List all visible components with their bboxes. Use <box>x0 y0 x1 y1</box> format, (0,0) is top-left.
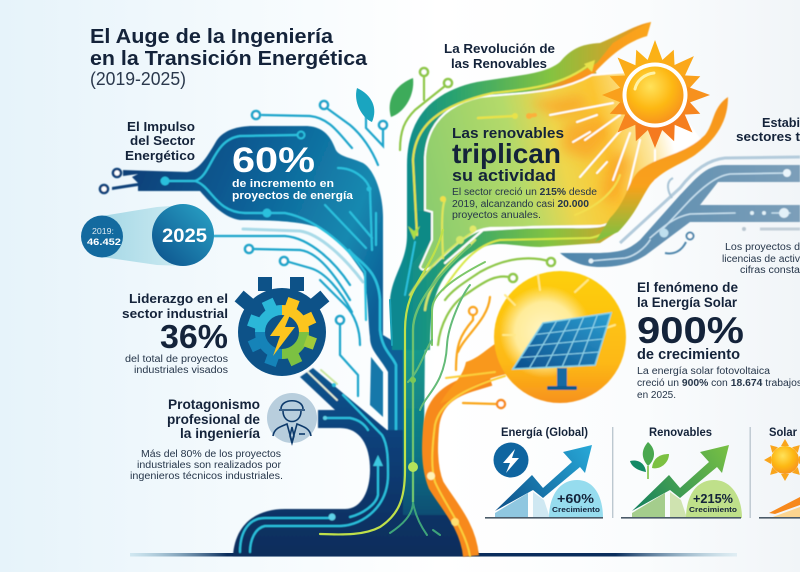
text: stability body, cropped at right edge: Los proyectos d <box>725 242 800 253</box>
chart card: renewables: Renovables <box>649 427 712 439</box>
chart card: renewables <box>621 427 742 519</box>
panel text: renewables triple: triplican <box>452 138 561 169</box>
panel: professional role: Protagonismo <box>168 397 260 412</box>
leaf: teal <box>356 88 374 122</box>
gear icon <box>235 277 329 376</box>
chart card: global energy: Energía (Global) <box>501 427 588 439</box>
growth arrow <box>632 445 729 511</box>
branch tip nodes <box>113 169 121 177</box>
panel: industrial leadership: Liderazgo en el <box>129 291 228 306</box>
panel: solar energy stat: La energía solar fotovoltaica <box>637 366 770 377</box>
text: stability body, cropped at right edge: licencias de activ <box>722 254 800 265</box>
orange blob joining circle <box>440 338 515 404</box>
icon: lightning badge <box>494 442 528 478</box>
panel: professional role: industriales son realizados por <box>137 460 282 471</box>
blue stub beside trunk <box>370 357 383 417</box>
panel text: renewables triple: su actividad <box>452 166 556 185</box>
panel: solar energy stat <box>637 280 800 401</box>
chart card: renewables: +215% <box>693 492 733 506</box>
leaf: green <box>390 78 413 117</box>
lightning bolt <box>270 310 295 356</box>
heading: stability, cropped at right edge <box>736 115 800 144</box>
panel text: renewables triple <box>452 125 597 221</box>
panel: energy sector heading: Energético <box>125 148 195 163</box>
heading: stability, cropped at right edge: Estabi <box>762 115 800 130</box>
panel: industrial leadership: industriales visados <box>134 365 228 376</box>
orange overlay on upper band <box>517 22 651 96</box>
sun <box>602 40 710 148</box>
orange glow patches <box>528 95 632 205</box>
heading: renewables revolution: La Revolución de <box>444 41 555 56</box>
panel: energy sector heading: El Impulso <box>127 119 195 134</box>
panel text: renewables triple: 2019, alcanzando casi 20.000 <box>452 199 589 210</box>
blue branch lines on white <box>214 109 383 396</box>
orange branch <box>430 378 490 556</box>
chart card: solar, cropped: Solar <box>769 427 798 439</box>
stat: 60 percent <box>232 141 354 202</box>
outer green band <box>390 22 651 350</box>
right orange band <box>595 97 728 242</box>
icon: small sun <box>764 439 800 481</box>
title <box>90 26 368 89</box>
chart card: global energy: Crecimiento <box>552 505 600 514</box>
gear teeth <box>247 297 317 367</box>
text: stability body, cropped at right edge <box>722 242 800 276</box>
icon: engineer portrait <box>267 393 317 443</box>
green tint of central trunk <box>403 345 455 515</box>
growth arrow <box>495 445 592 511</box>
panel: industrial leadership <box>122 291 228 376</box>
stat: 60 percent: proyectos de energía <box>232 190 354 202</box>
bottom ground line <box>130 553 737 556</box>
separator <box>612 427 613 518</box>
panel: solar energy stat: El fenómeno de <box>637 280 738 295</box>
panel: energy sector heading <box>125 119 195 163</box>
tree: blue engineering branches <box>100 101 480 556</box>
icon: leaves <box>630 442 669 479</box>
trunk lines <box>320 230 485 535</box>
panel: energy sector heading: del Sector <box>130 133 195 148</box>
circuit dots <box>160 176 372 218</box>
dark teal notch <box>407 210 432 270</box>
panel: professional role: ingenieros técnicos industriales. <box>130 471 283 482</box>
inner panel <box>420 70 700 270</box>
comparison 2019 to 2025 <box>81 204 214 266</box>
title: en la Transición Energética <box>90 48 368 70</box>
stat: 60 percent: de incremento en <box>232 178 334 190</box>
panel: professional role: Más del 80% de los proyectos <box>141 449 281 460</box>
panel: solar energy stat: creció un 900% con 18.674 trabajos <box>637 378 800 389</box>
orange wire nodes <box>456 297 496 404</box>
comparison 2019 to 2025: 2025 <box>162 226 207 247</box>
lime trunk line <box>320 230 443 534</box>
growth bars <box>632 480 742 518</box>
title: El Auge de la Ingeniería <box>90 26 334 48</box>
panel: professional role: profesional de <box>167 412 260 427</box>
gear dark backing <box>235 277 329 376</box>
heading: renewables revolution: las Renovables <box>451 56 547 71</box>
panel: professional role <box>130 397 283 482</box>
growth arrow <box>769 497 800 514</box>
heading: stability, cropped at right edge: sectores t <box>736 129 800 144</box>
heading: renewables revolution <box>444 41 555 71</box>
gear ring <box>260 310 304 354</box>
yellow branch lines <box>432 372 505 556</box>
comparison 2019 to 2025: 46.452 <box>87 237 121 248</box>
node circles <box>245 101 387 324</box>
up arrow marker <box>373 455 383 466</box>
text: stability body, cropped at right edge: cifras consta <box>740 265 800 276</box>
green trunk line <box>413 245 470 502</box>
panel: industrial leadership: 36% <box>160 318 228 355</box>
tree: green renewables branch <box>390 22 728 350</box>
white light rays <box>550 103 655 190</box>
cyan circuit lines in upper branch <box>165 135 396 485</box>
chart card: solar, cropped <box>759 427 800 519</box>
lower blue branch and root mass <box>233 368 480 556</box>
panel: solar energy stat: en 2025. <box>637 390 676 401</box>
chart card: global energy: +60% <box>557 492 594 506</box>
icon: solar panel <box>513 313 611 390</box>
separator <box>750 427 751 518</box>
chart card: global energy <box>485 427 603 519</box>
panel: industrial leadership: sector industrial <box>122 306 228 321</box>
lime lines with arrow <box>405 64 640 310</box>
cyan lines in lower branch <box>240 395 388 552</box>
panel: industrial leadership: del total de proyectos <box>125 354 228 365</box>
panel text: renewables triple: proyectos anuales. <box>452 210 541 221</box>
chart card: renewables: Crecimiento <box>689 505 737 514</box>
stat: 60 percent: 60% <box>232 141 315 180</box>
comparison 2019 to 2025: 2019: <box>92 226 114 236</box>
title: (2019-2025) <box>90 69 186 89</box>
steel branch: traditional sectors <box>560 157 800 267</box>
solar badge <box>427 271 626 556</box>
panel text: renewables triple: Las renovables <box>452 125 564 142</box>
growth bars <box>495 480 603 518</box>
yellow disc <box>494 271 626 403</box>
panel: solar energy stat: la Energía Solar <box>637 295 738 310</box>
panel: solar energy stat: 900% <box>637 310 744 351</box>
panel text: renewables triple: El sector creció un 215% desde <box>452 187 597 198</box>
upper blue branch shape <box>112 126 403 432</box>
panel: professional role: la ingeniería <box>180 426 260 441</box>
green stem lines and nodes <box>400 76 552 345</box>
panel: solar energy stat: de crecimiento <box>637 346 740 363</box>
